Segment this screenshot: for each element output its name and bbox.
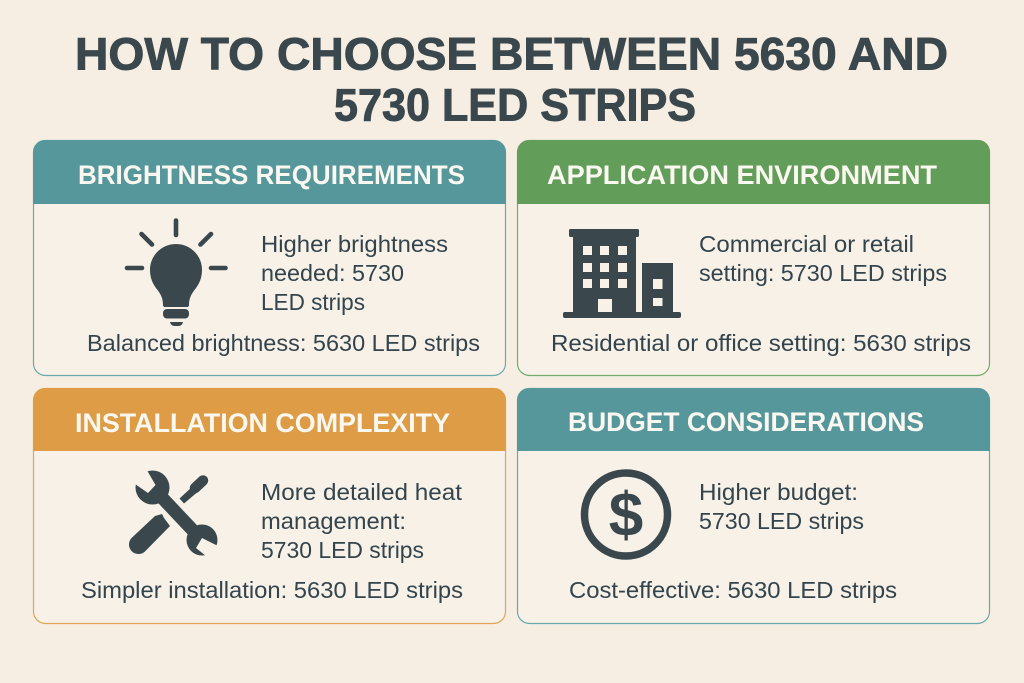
title bbox=[75, 28, 948, 130]
text: balanced brightness: Balanced brightness: 5630 LED strips bbox=[87, 330, 480, 356]
icon: dollar coin: $ bbox=[609, 481, 643, 550]
text: higher brightness: LED strips bbox=[261, 289, 365, 315]
icon: wrench and screwdriver bbox=[126, 462, 228, 566]
icon: buildings bbox=[563, 229, 681, 318]
text: higher brightness bbox=[261, 231, 448, 315]
text: higher brightness: Higher brightness bbox=[261, 231, 448, 257]
text: higher budget bbox=[699, 479, 864, 534]
text: commercial or retail: setting: 5730 LED strips bbox=[699, 260, 947, 286]
panel header: brightness requirements: BRIGHTNESS REQUIREMENTS bbox=[78, 160, 465, 190]
panel: application environment bbox=[517, 140, 990, 376]
text: simpler installation: Simpler installation: 5630 LED strips bbox=[81, 577, 463, 603]
panel header: installation complexity: INSTALLATION COMPLEXITY bbox=[75, 408, 450, 438]
panel: installation complexity bbox=[33, 388, 506, 624]
title: HOW TO CHOOSE BETWEEN 5630 AND bbox=[75, 28, 948, 80]
panel header: budget considerations: BUDGET CONSIDERATIONS bbox=[568, 407, 924, 437]
text: higher brightness: needed: 5730 bbox=[261, 260, 404, 286]
text: more detailed heat management: 5730 LED strips bbox=[261, 537, 424, 563]
text: more detailed heat management: More detailed heat bbox=[261, 479, 463, 505]
panel header: installation complexity bbox=[33, 388, 506, 451]
title: 5730 LED STRIPS bbox=[334, 80, 696, 130]
icon: light bulb bbox=[127, 220, 226, 326]
icon: dollar coin bbox=[584, 473, 668, 556]
text: more detailed heat management bbox=[261, 479, 463, 563]
panel: budget considerations bbox=[517, 388, 990, 624]
text: commercial or retail bbox=[699, 231, 947, 286]
panel header: application environment: APPLICATION ENVIRONMENT bbox=[547, 160, 938, 190]
text: higher budget: 5730 LED strips bbox=[699, 508, 864, 534]
text: higher budget: Higher budget: bbox=[699, 479, 858, 505]
text: commercial or retail: Commercial or retail bbox=[699, 231, 914, 257]
text: residential or office: Residential or office setting: 5630 strips bbox=[551, 330, 971, 356]
panel header: budget considerations bbox=[517, 388, 990, 451]
panel header: brightness requirements bbox=[33, 140, 506, 204]
panel: brightness requirements bbox=[33, 140, 506, 376]
text: cost-effective: Cost-effective: 5630 LED strips bbox=[569, 577, 897, 603]
panel header: application environment bbox=[517, 140, 990, 204]
text: more detailed heat management: management: bbox=[261, 508, 406, 534]
